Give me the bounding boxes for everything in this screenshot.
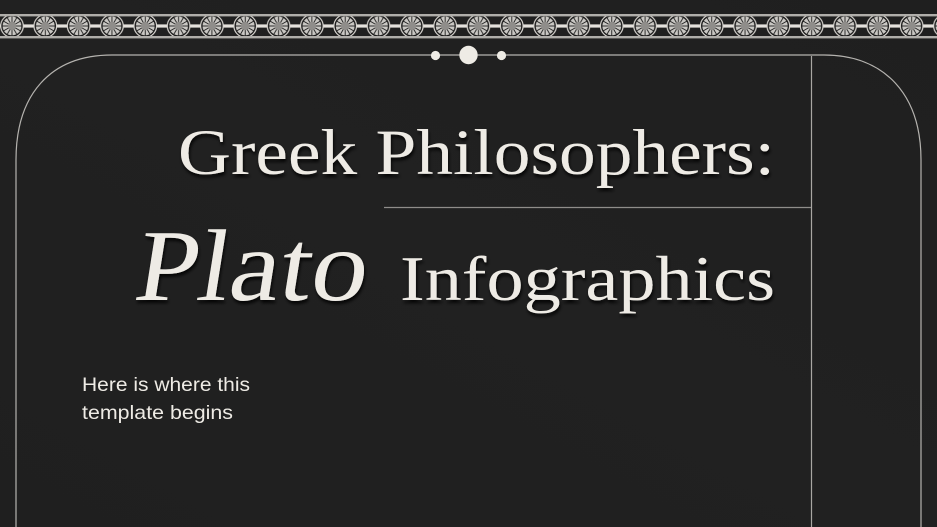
subtitle: Here is where this <box>82 374 250 396</box>
title word: Infographics: Infographics <box>400 244 775 314</box>
title divider <box>384 206 811 208</box>
title word: Plato: Plato <box>128 211 378 323</box>
title line 1: Greek Philosophers: <box>178 117 775 189</box>
subtitle <box>82 374 250 424</box>
ornamental wheel band <box>0 14 937 38</box>
dot ornament <box>431 46 506 64</box>
vertical rule <box>810 56 812 527</box>
subtitle: template begins <box>82 402 233 424</box>
